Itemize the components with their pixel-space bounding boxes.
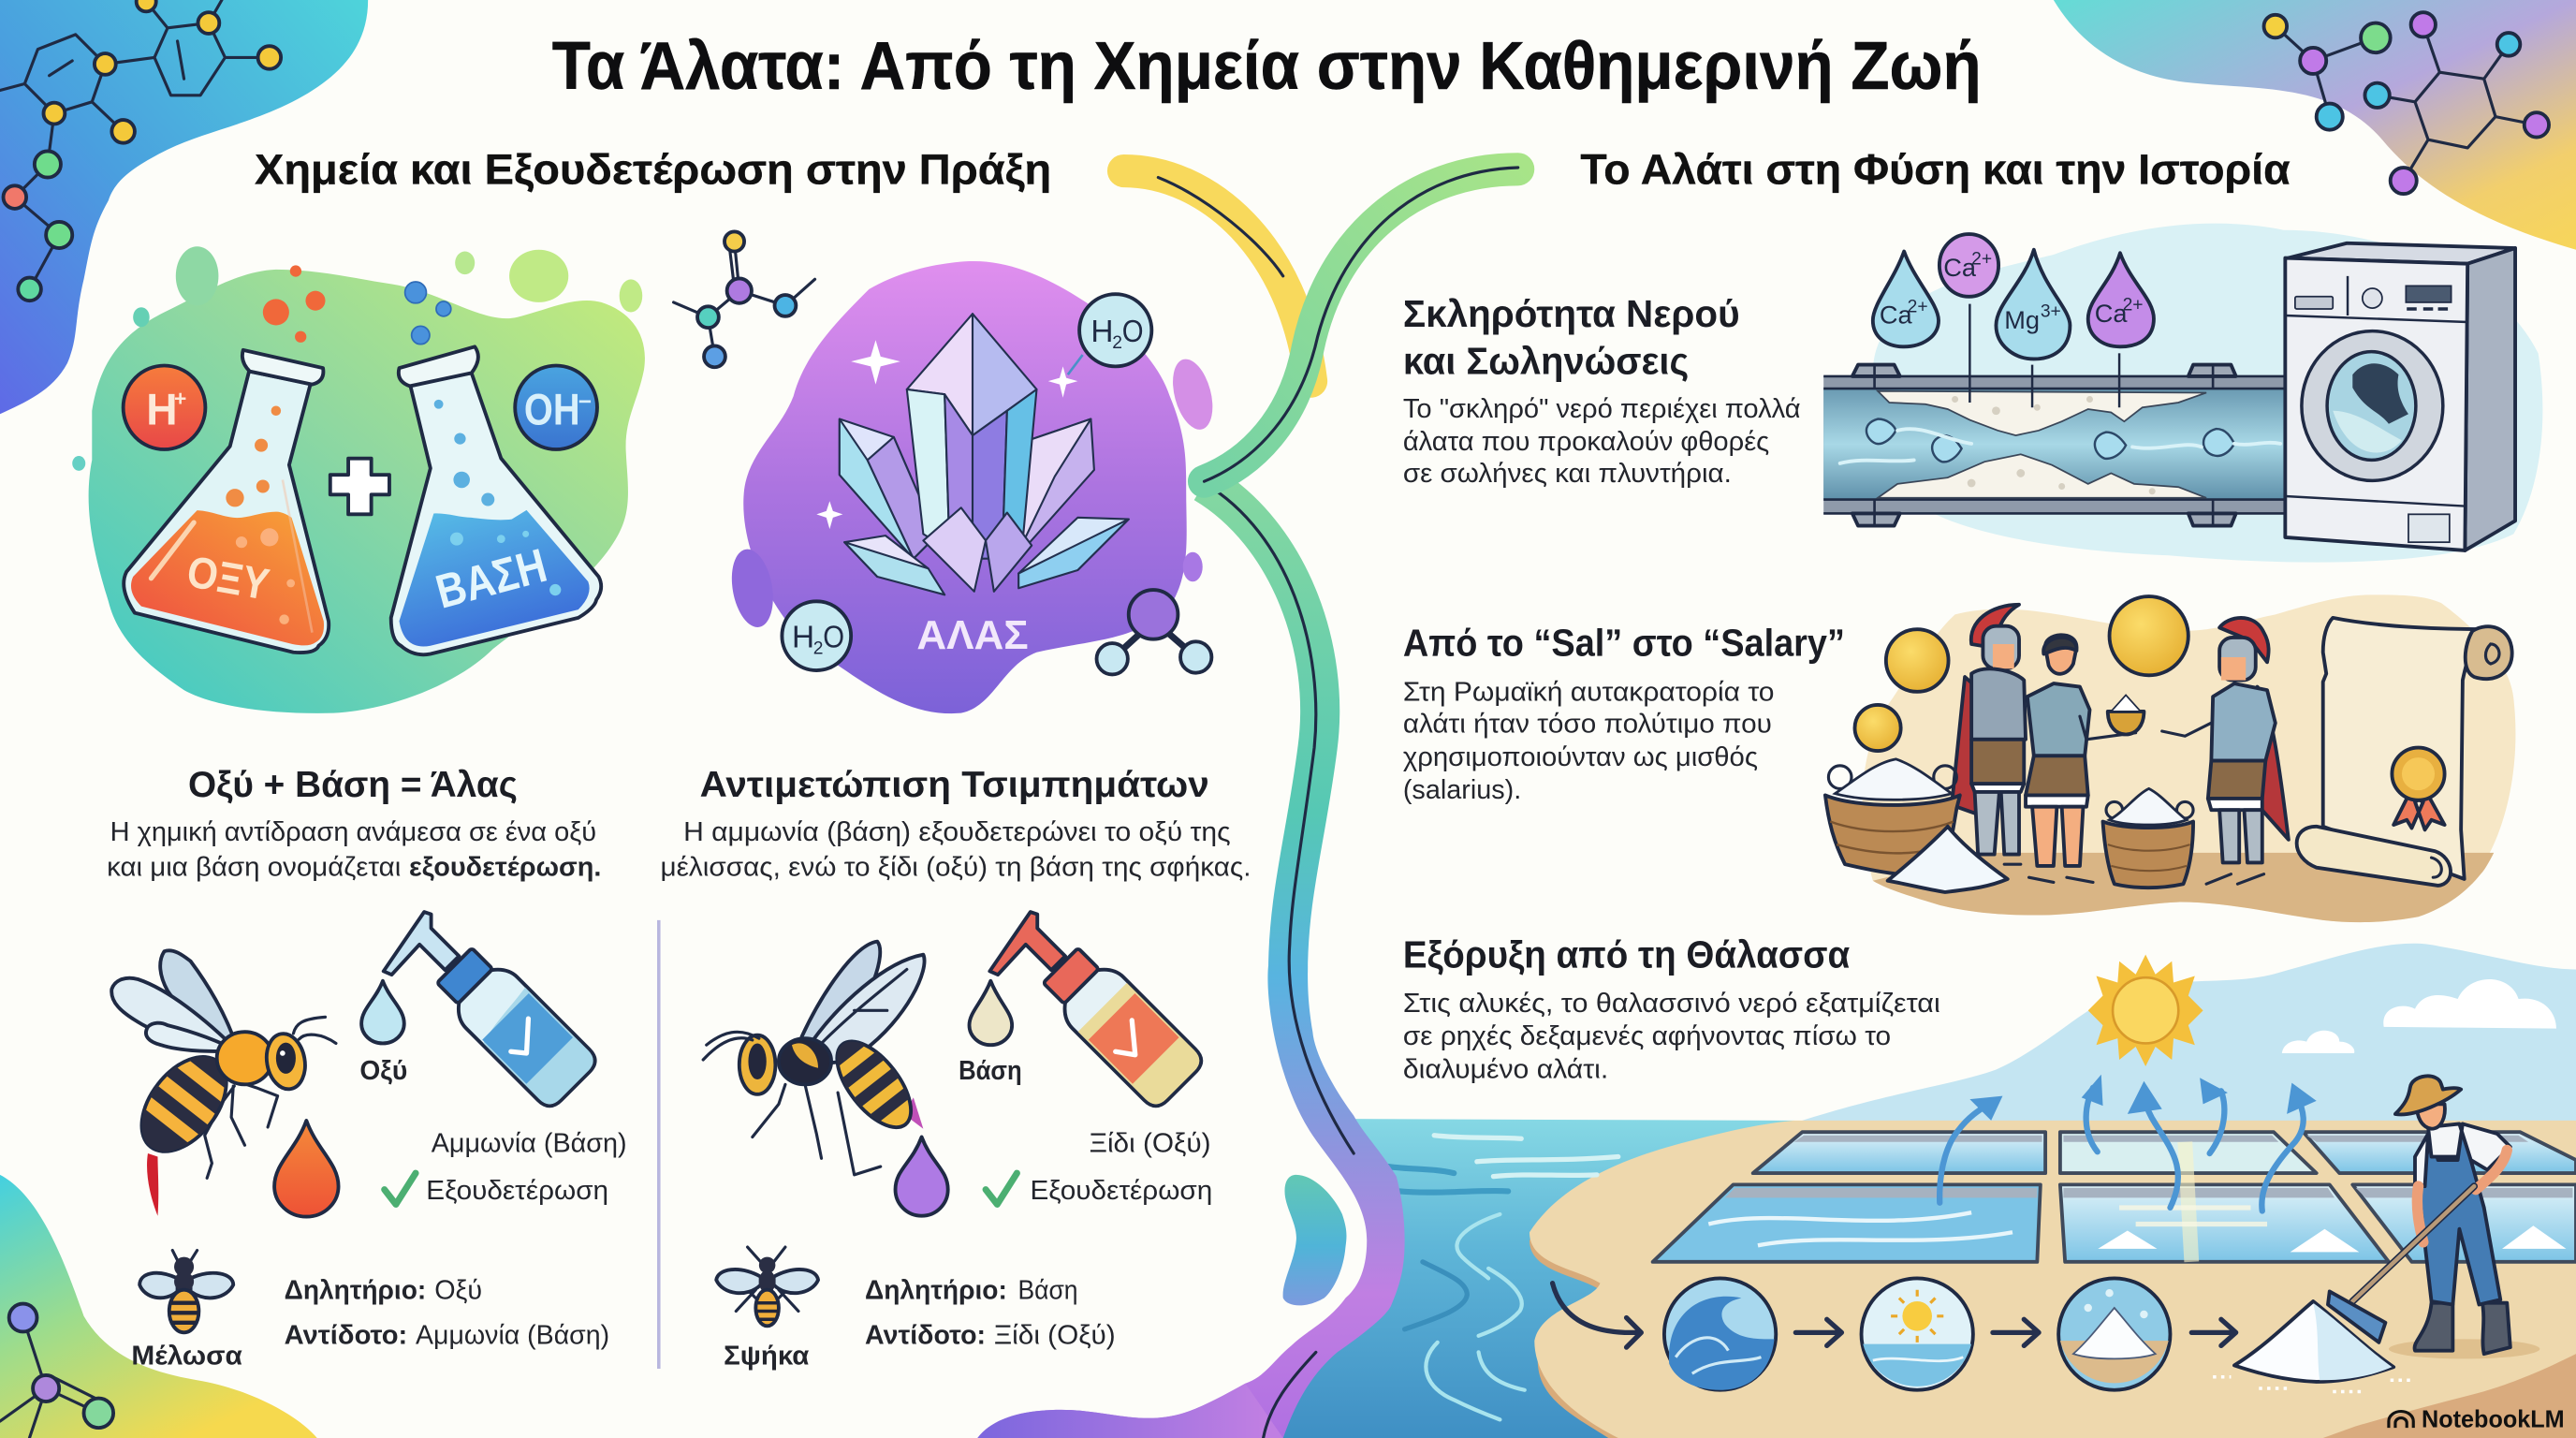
block: water hardness text	[1403, 292, 1801, 489]
ion drop: Ca2+ blue	[1873, 252, 1939, 346]
corner blob: top left	[0, 0, 368, 414]
arm right	[2476, 1151, 2507, 1190]
ground	[1873, 853, 2494, 922]
bottle check mark: vinegar	[1116, 1020, 1135, 1055]
water molecule	[1097, 590, 1211, 674]
base bubbles	[405, 282, 451, 345]
washing machine	[2285, 243, 2515, 550]
block: sea extraction text: διαλυμένο αλάτι.	[1403, 1054, 1608, 1084]
plus sign	[330, 459, 389, 514]
bee facts: Δηλητήριο:	[285, 1275, 426, 1305]
ion: H+	[124, 365, 205, 449]
illustration: hard water pipe and washer	[1823, 224, 2542, 563]
pale blue blob	[1871, 224, 2542, 563]
drop: purple venom	[896, 1137, 948, 1216]
block: acid + base text	[107, 765, 601, 882]
boots	[2415, 1303, 2510, 1354]
wasp facts: Αντίδοτο:	[865, 1321, 986, 1351]
clouds	[2282, 979, 2556, 1053]
evaporation arrow heads	[1969, 1075, 2317, 1121]
ion drop: Mg3+	[1996, 250, 2070, 407]
decorative blobs	[726, 355, 1220, 630]
flask: acid: ΟΞΥ	[183, 547, 272, 610]
broom handle core	[2352, 1186, 2474, 1301]
sand shoreline lip	[1530, 1127, 2576, 1438]
ion: OH-	[515, 365, 597, 449]
water bubble: top: H	[1090, 315, 1113, 349]
arm left	[2417, 1186, 2423, 1242]
tan background	[1863, 594, 2515, 922]
bottle: ammonia	[374, 898, 601, 1124]
divider	[658, 920, 660, 1369]
check: neutralisation 1: Εξουδετέρωση	[426, 1176, 608, 1206]
molecule: top right	[2264, 12, 2549, 194]
man centre	[2026, 635, 2144, 882]
darker foreground sand	[2323, 1354, 2576, 1438]
roman soldier left	[1952, 605, 2026, 864]
broom handle	[2352, 1186, 2474, 1301]
process: curved arrow from sea	[1553, 1284, 1641, 1347]
block: sal to salary text: Στη Ρωμαϊκή αυτακρατορία το	[1403, 678, 1775, 708]
decorative droplets	[72, 246, 642, 471]
water flow droplets	[1866, 419, 2234, 462]
coins	[1855, 596, 2188, 751]
label: vinegar: Ξίδι (Οξύ)	[1090, 1128, 1211, 1158]
subheading: Οξύ + Βάση = Άλας	[188, 765, 518, 805]
block: sal to salary text: χρησιμοποιούνταν ως μισθός	[1403, 742, 1758, 772]
block: sal to salary text: Από το “Sal” στο “Salary”	[1403, 621, 1845, 664]
acid bubbles	[263, 265, 326, 343]
label: wasp: Σψήκα	[724, 1341, 810, 1371]
ion: H+: H	[146, 386, 178, 435]
ion: OH-: OH	[524, 386, 580, 435]
pond rims	[1725, 1136, 2572, 1197]
label: acid: Οξύ	[359, 1056, 407, 1086]
check: neutralisation 2: Εξουδετέρωση	[1030, 1176, 1212, 1206]
block: sal to salary text	[1403, 621, 1845, 805]
worker with broom	[2328, 1076, 2539, 1358]
process: sun over water icon	[1862, 1278, 1973, 1390]
body bold word: εξουδετέρωση.	[409, 852, 601, 882]
icon: small wasp	[716, 1247, 818, 1326]
molecule: bottom left	[0, 1304, 113, 1438]
water bubble: bottom: H	[792, 620, 814, 654]
broom head	[2328, 1291, 2385, 1343]
sand	[1530, 1121, 2576, 1438]
process: arrow 3	[2191, 1319, 2236, 1345]
corner blob: top right	[2054, 0, 2576, 250]
heading: right section: Το Αλάτι στη Φύση και την Ιστορία	[1580, 146, 2291, 194]
body line 1: Η χημική αντίδραση ανάμεσα σε ένα οξύ	[110, 817, 596, 847]
water bubble: bottom: 2	[813, 639, 824, 659]
block: water hardness text: Το "σκληρό" νερό περιέχει πολλά	[1403, 394, 1801, 424]
block: sea extraction text: Στις αλυκές, το θαλασσινό νερό εξατμίζεται	[1403, 989, 1940, 1019]
block: water hardness text: άλατα που προκαλούν φθορές	[1403, 427, 1769, 457]
illustration: acid plus base	[72, 246, 645, 713]
sparkles	[816, 340, 1077, 529]
illustration: salt crystal	[726, 261, 1220, 713]
hat	[2395, 1076, 2461, 1114]
ion drop: Mg3+: 3+	[2041, 302, 2061, 322]
process: salt heap icon	[2058, 1278, 2170, 1390]
salt pile	[1888, 827, 2008, 892]
bee facts: Αντίδοτο:	[285, 1321, 407, 1351]
central ribbon: lower branch	[977, 483, 1405, 1438]
drop: orange poison	[274, 1121, 339, 1217]
ion drop: Ca2+ blue: 2+	[1908, 297, 1928, 316]
salt ponds	[1653, 1132, 2576, 1262]
flow streaks	[1840, 429, 2280, 463]
illustration: roman salt payment	[1825, 594, 2515, 922]
water bubble: top: O	[1122, 315, 1144, 349]
body line 2: και μια βάση ονομάζεται	[107, 852, 401, 882]
wasp facts	[865, 1275, 1116, 1351]
corner blob: bottom left	[0, 1175, 317, 1438]
pipe	[1823, 365, 2284, 526]
block: sal to salary text: (salarius).	[1403, 775, 1521, 805]
central ribbon: yellow branch	[1123, 171, 1311, 381]
roman soldier right	[2162, 618, 2289, 884]
scale specks	[1952, 396, 2156, 494]
block: sal to salary text: αλάτι ήταν τόσο πολύτιμο που	[1403, 710, 1772, 740]
scale deposit bottom	[1878, 454, 2206, 498]
body line 2: μέλισσας, ενώ το ξίδι (οξύ) τη βάση της σφήκας.	[661, 852, 1251, 882]
drop: ammonia	[361, 981, 404, 1043]
block: water hardness text: Σκληρότητα Νερού	[1403, 292, 1740, 335]
wasp facts: Βάση	[1017, 1275, 1078, 1305]
subheading: Αντιμετώπιση Τσιμπημάτων	[700, 765, 1209, 805]
teal inner blob	[1283, 1175, 1346, 1305]
body line 1: Η αμμωνία (βάση) εξουδετερώνει το οξύ της	[683, 817, 1231, 847]
water bubble: top: 2	[1112, 333, 1122, 353]
flask: base: ΒΑΣΗ	[431, 538, 552, 619]
wasp facts: Δηλητήριο:	[865, 1275, 1007, 1305]
overalls	[2419, 1123, 2500, 1304]
water bubble: bottom	[782, 601, 851, 670]
ion: OH-: −	[578, 389, 592, 415]
bottle: vinegar	[980, 898, 1207, 1124]
scroll	[2297, 618, 2512, 886]
basket centre	[2103, 788, 2193, 888]
ion bubble: Ca2+ purple: Ca	[1943, 253, 1977, 282]
evaporation arrows	[1939, 1088, 2304, 1211]
basket left	[1825, 759, 1960, 876]
bee facts: Αμμωνία (Βάση)	[416, 1321, 609, 1351]
ocean	[1280, 1119, 1794, 1438]
water bubble: bottom: O	[823, 620, 844, 654]
process: arrow 2	[1993, 1319, 2039, 1345]
icon: small bee	[139, 1251, 233, 1332]
flask: acid	[124, 350, 329, 653]
label: ammonia: Αμμωνία (Βάση)	[432, 1128, 627, 1158]
label: bee: Μέλωσα	[131, 1341, 242, 1371]
shirt	[2428, 1123, 2510, 1170]
scale deposit top	[1878, 391, 2206, 435]
ion drop: Ca2+ blue: Ca	[1880, 301, 1912, 330]
block: water hardness text: και Σωληνώσεις	[1403, 339, 1689, 382]
water bubble: top	[1068, 294, 1151, 374]
heading: left section: Χημεία και Εξουδετέρωση στην Πράξη	[255, 146, 1051, 194]
drop: vinegar	[970, 981, 1012, 1045]
medal	[2392, 748, 2445, 829]
block: sea extraction text: Εξόρυξη από τη Θάλασσα	[1403, 933, 1850, 976]
illustration: sun	[2088, 955, 2203, 1066]
salt heap	[2213, 1301, 2415, 1392]
ion drop: Ca2+ lilac	[2088, 253, 2154, 407]
shirt sleeve left	[2415, 1134, 2428, 1186]
ion: H+: +	[174, 386, 186, 410]
green blob	[89, 270, 645, 713]
ion bubble: Ca2+ purple: 2+	[1971, 250, 1992, 270]
block: sea extraction text	[1403, 933, 1940, 1084]
pond highlights and salt	[1708, 1142, 2566, 1262]
purple blob	[743, 261, 1187, 713]
head	[2417, 1104, 2445, 1129]
label: salt: ΑΛΑΣ	[916, 612, 1029, 658]
flask: base	[391, 346, 601, 654]
label: base: Βάση	[959, 1056, 1022, 1086]
block: water hardness text: σε σωλήνες και πλυντήρια.	[1403, 459, 1732, 489]
bottle check mark: ammonia	[511, 1019, 528, 1053]
illustration: wasp	[703, 942, 926, 1175]
ion bubble: Ca2+ purple	[1939, 234, 1998, 403]
block: stings text	[661, 765, 1251, 882]
crystal shards	[840, 314, 1129, 594]
molecule: top centre	[674, 231, 815, 367]
logo: NotebookLM: NotebookLM	[2422, 1407, 2565, 1433]
bee facts	[285, 1275, 609, 1351]
illustration: bee	[111, 950, 336, 1216]
bee facts: Οξύ	[434, 1275, 482, 1305]
process: arrow 1	[1795, 1319, 1841, 1345]
block: sea extraction text: σε ρηχές δεξαμενές αφήνοντας πίσω το	[1403, 1021, 1891, 1051]
title: Τα Άλατα: Από τη Χημεία στην Καθημερινή Ζωή	[552, 29, 1982, 104]
ion drop: Ca2+ lilac: Ca	[2095, 299, 2128, 328]
ocean wave highlights	[1388, 1136, 1618, 1419]
ion drop: Ca2+ lilac: 2+	[2123, 296, 2144, 315]
ground shadow	[2389, 1339, 2539, 1358]
central ribbon: green branch	[1204, 168, 1518, 481]
ion drop: Mg3+: Mg	[2004, 305, 2040, 334]
process: wave icon	[1664, 1278, 1776, 1390]
sky	[1802, 944, 2576, 1151]
wasp facts: Ξίδι (Οξύ)	[994, 1321, 1116, 1351]
molecule: top left	[0, 0, 281, 301]
